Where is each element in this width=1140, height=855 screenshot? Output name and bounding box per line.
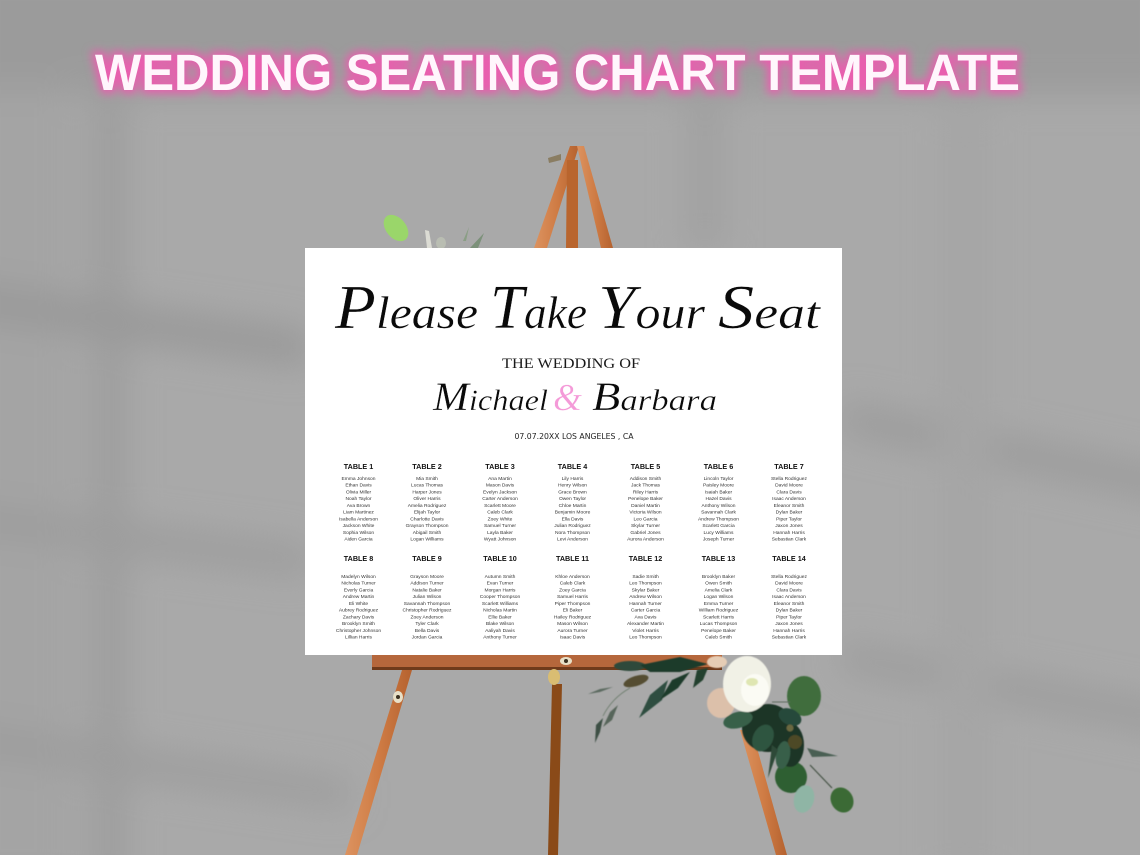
table 9: Jordan Garcia: [412, 635, 443, 641]
table 13: Caleb Smith: [705, 635, 732, 641]
table 9: [403, 554, 452, 641]
table 7: Stella Rodriguez: [771, 476, 807, 482]
table 7: [771, 462, 807, 543]
table 5: Addison Smith: [630, 476, 662, 482]
table 7: Clara Davis: [776, 489, 802, 495]
table 14: Sebastian Clark: [772, 635, 807, 641]
table 5: Victoria Wilson: [629, 510, 662, 516]
table 7: Hannah Harris: [773, 530, 805, 536]
script heading: Seat: [718, 274, 821, 342]
table 14: Dylan Baker: [776, 608, 803, 614]
table 13: Emma Turner: [704, 601, 734, 607]
table 5: TABLE 5: [631, 462, 660, 471]
table 10: Blake Wilson: [486, 621, 514, 627]
date and place: 07.07.20XX LOS ANGELES , CA: [514, 432, 634, 441]
table 1: Isabella Anderson: [339, 516, 378, 522]
table 11: Eli Baker: [563, 608, 583, 614]
table 3: Mason Davis: [486, 483, 515, 489]
table 9: Savannah Thompson: [404, 601, 450, 607]
table 9: Christopher Rodriguez: [403, 608, 452, 614]
subheading: THE WEDDING OF: [502, 356, 640, 372]
table 12: Leo Thompson: [629, 635, 662, 641]
table 13: TABLE 13: [702, 554, 735, 563]
table 9: Grayson Moore: [410, 574, 444, 580]
table 3: Wyatt Johnson: [484, 537, 516, 543]
table 3: Layla Baker: [487, 530, 513, 536]
table 8: [336, 554, 381, 641]
table 14: Stella Rodriguez: [771, 574, 807, 580]
script heading: Take: [490, 274, 587, 342]
table 10: [480, 554, 520, 641]
couple names: Barbara: [592, 374, 717, 419]
table 12: Sadie Smith: [632, 574, 659, 580]
table 12: Hannah Turner: [629, 601, 662, 607]
table 7: Sebastian Clark: [772, 537, 807, 543]
table 4: Benjamin Moore: [555, 510, 591, 516]
table 10: Anthony Turner: [483, 635, 517, 641]
table 6: Lucy Williams: [704, 530, 734, 536]
table 7: Isaac Anderson: [772, 496, 806, 502]
table 13: Penelope Baker: [701, 628, 736, 634]
table 2: Oliver Harris: [413, 496, 441, 502]
table 11: TABLE 11: [556, 554, 589, 563]
table 2: Mia Smith: [416, 476, 438, 482]
table 8: Lillian Harris: [345, 635, 373, 641]
table 11: Samuel Harris: [557, 594, 589, 600]
table 5: Penelope Baker: [628, 496, 663, 502]
table 1: [339, 462, 378, 543]
table 5: Daniel Martin: [631, 503, 660, 509]
table 7: TABLE 7: [774, 462, 804, 471]
table 6: Joseph Turner: [703, 537, 735, 543]
table 6: Lincoln Taylor: [704, 476, 734, 482]
table 6: Andrew Thompson: [698, 516, 739, 522]
table 1: Noah Taylor: [345, 496, 372, 502]
table 2: Charlotte Davis: [410, 516, 444, 522]
table 1: Sophia Wilson: [343, 530, 374, 536]
table 6: [698, 462, 739, 543]
table 9: Julian Wilson: [413, 594, 442, 600]
table 5: Riley Harris: [633, 489, 659, 495]
table 8: Zachary Davis: [343, 614, 375, 620]
table 10: Morgan Harris: [485, 587, 516, 593]
table 1: Liam Martinez: [343, 510, 374, 516]
title with pink glow: WEDDING SEATING CHART TEMPLATE: [95, 44, 1020, 101]
table 6: TABLE 6: [704, 462, 733, 471]
table 2: [406, 462, 449, 543]
couple names: [432, 374, 717, 419]
script heading: Your: [598, 274, 706, 342]
table 10: Ellie Baker: [488, 614, 512, 620]
couple names: &: [553, 377, 582, 419]
easel lower legs and crossbar: [345, 655, 787, 855]
table 9: Natalie Baker: [412, 587, 442, 593]
table 9: Bella Davis: [415, 628, 440, 634]
table 5: Leo Garcia: [634, 516, 658, 522]
table 10: Scarlett Williams: [482, 601, 519, 607]
table 13: Owen Smith: [705, 581, 732, 587]
table 4: Levi Anderson: [557, 537, 588, 543]
table 8: Everly Garcia: [344, 587, 373, 593]
table 1: Ethan Davis: [345, 483, 372, 489]
table 5: Aurora Anderson: [627, 537, 664, 543]
table 8: Brooklyn Smith: [342, 621, 375, 627]
table 3: [482, 462, 518, 543]
table 1: Ava Brown: [347, 503, 371, 509]
table 12: Ava Davis: [635, 614, 657, 620]
table 2: Abigail Smith: [413, 530, 442, 536]
table 4: Chloe Martin: [559, 503, 587, 509]
table 3: Scarlett Moore: [484, 503, 516, 509]
table 8: TABLE 8: [344, 554, 373, 563]
script heading: [334, 274, 821, 342]
title with pink glow: WEDDING SEATING CHART TEMPLATE: [95, 44, 1020, 101]
table 14: Eleanor Smith: [774, 601, 805, 607]
table 11: Khloe Anderson: [555, 574, 590, 580]
table 7: Dylan Baker: [776, 510, 803, 516]
table 14: TABLE 14: [772, 554, 806, 563]
table 3: TABLE 3: [485, 462, 515, 471]
table 9: TABLE 9: [412, 554, 442, 563]
table 12: Alexander Martin: [627, 621, 664, 627]
table 11: Aurora Turner: [557, 628, 588, 634]
table 10: Autumn Smith: [485, 574, 516, 580]
table 10: Aaliyah Davis: [485, 628, 515, 634]
table 1: Aiden Garcia: [344, 537, 373, 543]
table 13: Lucas Thompson: [700, 621, 737, 627]
table 2: Logan Williams: [410, 537, 444, 543]
floral arrangement: [588, 656, 858, 817]
table 11: Zoey Garcia: [559, 587, 586, 593]
seating chart board: [305, 248, 842, 655]
table 7: Piper Taylor: [776, 516, 802, 522]
table 8: Madelyn Wilson: [341, 574, 376, 580]
table 5: Jack Thomas: [631, 483, 661, 489]
table 3: Samuel Turner: [484, 523, 516, 529]
table 10: Nicholas Martin: [483, 608, 517, 614]
script heading: Please: [334, 274, 478, 342]
table 7: David Moore: [775, 483, 803, 489]
table 8: Eli White: [349, 601, 368, 607]
table 11: [554, 554, 592, 641]
table 1: Emma Johnson: [342, 476, 376, 482]
table 13: Brooklyn Baker: [702, 574, 735, 580]
table 3: Zoey White: [488, 516, 513, 522]
table 8: Aubrey Rodriguez: [339, 608, 379, 614]
table 3: Carter Anderson: [482, 496, 518, 502]
table 8: Andrew Martin: [343, 594, 375, 600]
table 12: Skylar Baker: [632, 587, 660, 593]
table 6: Scarlett Garcia: [702, 523, 735, 529]
table 13: Logan Wilson: [704, 594, 734, 600]
table 9: Tyler Clark: [415, 621, 439, 627]
table 14: Isaac Anderson: [772, 594, 806, 600]
table 13: [699, 554, 739, 641]
table 2: Elijah Taylor: [414, 510, 441, 516]
table 10: Evan Turner: [487, 581, 514, 587]
table 12: [627, 554, 664, 641]
table 12: Andrew Wilson: [629, 594, 662, 600]
table 14: Clara Davis: [776, 587, 802, 593]
table 11: Piper Thompson: [555, 601, 591, 607]
table 13: William Rodriguez: [699, 608, 739, 614]
table 13: Scarlett Harris: [703, 614, 735, 620]
table 10: Cooper Thompson: [480, 594, 520, 600]
table 2: TABLE 2: [412, 462, 442, 471]
table 12: TABLE 12: [629, 554, 662, 563]
table 1: TABLE 1: [344, 462, 373, 471]
table 4: Lily Harris: [562, 476, 584, 482]
table 5: Skylar Turner: [631, 523, 660, 529]
table 14: Piper Taylor: [776, 614, 802, 620]
table 5: [627, 462, 664, 543]
table 2: Harper Jones: [412, 489, 442, 495]
top greenery behind board: [379, 210, 484, 249]
table 11: Isaac Davis: [560, 635, 586, 641]
table 8: Nicholas Turner: [341, 581, 376, 587]
table 10: TABLE 10: [483, 554, 517, 563]
table 12: Leo Thompson: [629, 581, 662, 587]
table 3: Caleb Clark: [487, 510, 513, 516]
table 4: Ella Davis: [562, 516, 584, 522]
table 14: [771, 554, 807, 641]
table 6: Savannah Clark: [701, 510, 736, 516]
table 12: Carter Garcia: [631, 608, 660, 614]
table 11: Caleb Clark: [560, 581, 586, 587]
table 7: Eleanor Smith: [774, 503, 805, 509]
table 4: Julian Rodriguez: [554, 523, 591, 529]
table 3: Evelyn Jackson: [483, 489, 517, 495]
table 4: TABLE 4: [558, 462, 587, 471]
table 6: Hazel Davis: [705, 496, 732, 502]
table 6: Isaiah Baker: [705, 489, 732, 495]
table 12: Violet Harris: [632, 628, 659, 634]
table 11: Mason Wilson: [557, 621, 588, 627]
table 5: Gabriel Jones: [630, 530, 661, 536]
table 3: Ana Martin: [488, 476, 512, 482]
easel top legs: [534, 146, 613, 248]
table 14: Hannah Harris: [773, 628, 805, 634]
table 4: [554, 462, 591, 543]
table 7: Jaxon Jones: [775, 523, 803, 529]
table 2: Lucas Thomas: [411, 483, 444, 489]
table 4: Owen Taylor: [559, 496, 586, 502]
table 9: Addison Turner: [410, 581, 444, 587]
table 1: Olivia Miller: [346, 489, 372, 495]
table 14: Jaxon Jones: [775, 621, 803, 627]
table 11: Hailey Rodriguez: [554, 614, 592, 620]
table 4: Nora Thompson: [555, 530, 590, 536]
table 1: Jackson White: [343, 523, 375, 529]
table 4: Grace Brown: [558, 489, 587, 495]
table 6: Anthony Wilson: [702, 503, 736, 509]
table 9: Zoey Anderson: [411, 614, 444, 620]
table 8: Christopher Johnson: [336, 628, 381, 634]
table 2: Amelia Rodriguez: [408, 503, 447, 509]
table 14: David Moore: [775, 581, 803, 587]
table 13: Amelia Clark: [705, 587, 733, 593]
table 2: Grayson Thompson: [406, 523, 449, 529]
table 4: Henry Wilson: [558, 483, 587, 489]
couple names: Michael: [432, 374, 548, 419]
table 6: Paisley Moore: [703, 483, 734, 489]
